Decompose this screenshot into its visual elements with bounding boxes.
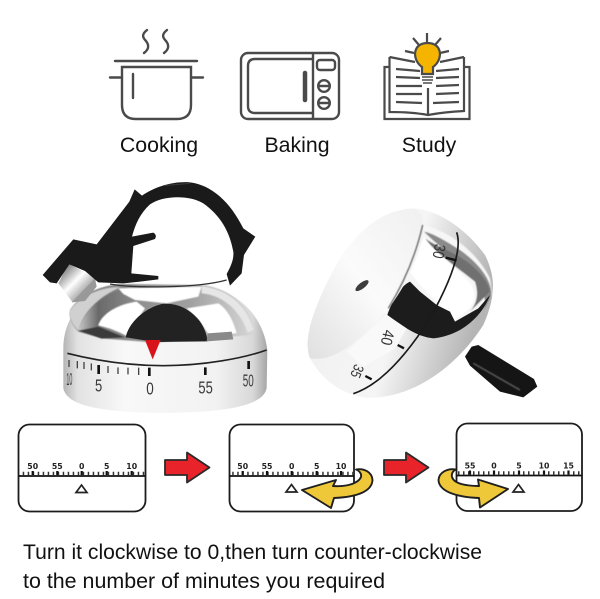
dial ticks xyxy=(69,360,139,375)
dial numbers: 0 xyxy=(146,380,154,399)
panel: dial turned clockwise xyxy=(230,424,354,512)
panel: dial at start: 55 xyxy=(52,462,63,471)
instruction text xyxy=(23,540,482,593)
panel: dial turned clockwise: 5 xyxy=(314,462,319,471)
black handle xyxy=(465,345,537,397)
panel: dial at start: 10 xyxy=(126,462,138,471)
icon: cooking pot xyxy=(110,30,203,119)
timer side view photo xyxy=(308,208,537,398)
white face xyxy=(308,209,423,359)
black handle xyxy=(43,182,255,286)
dial numbers: 55 xyxy=(198,378,213,398)
arrow: yellow curved left xyxy=(302,469,372,508)
icon: book with light bulb xyxy=(384,33,470,119)
panel: dial turned clockwise: 0 xyxy=(289,462,295,471)
dome white highlights xyxy=(118,287,202,303)
heading: Cooking: Cooking xyxy=(120,133,198,157)
spout xyxy=(58,263,97,302)
chrome reflections xyxy=(383,225,493,338)
arrow: yellow curved right xyxy=(438,469,508,508)
panel: dial set to five minutes: 55 xyxy=(465,462,475,470)
arrow: red right xyxy=(165,452,210,482)
instruction text: Turn it clockwise to 0,then turn counter-clockwise xyxy=(23,540,482,564)
white panel xyxy=(347,314,407,367)
icon: microwave xyxy=(241,53,339,119)
dome reflections xyxy=(70,284,255,343)
dial numbers: 10 xyxy=(66,369,72,389)
red pointer xyxy=(145,340,161,359)
panel: dial set to five minutes: 15 xyxy=(563,462,574,470)
panel: dial turned clockwise: 10 xyxy=(336,462,347,471)
dial number 30: 30 xyxy=(428,243,448,260)
face edge shadow xyxy=(388,225,423,308)
dial line xyxy=(353,232,458,394)
panel: dial turned clockwise: 55 xyxy=(262,462,272,471)
handle highlight xyxy=(163,183,190,186)
arrow: red right xyxy=(384,452,428,482)
panel: dial at start: 0 xyxy=(79,462,85,471)
dial line xyxy=(67,350,267,366)
kettle timer photo xyxy=(43,182,267,413)
panel: dial set to five minutes: 0 xyxy=(491,462,497,470)
dial numbers: 5 xyxy=(95,377,102,396)
instruction text: to the number of minutes you required xyxy=(23,569,385,593)
metal silhouette xyxy=(308,208,493,398)
panel: dial set to five minutes xyxy=(456,424,582,511)
panel: dial set to five minutes: 5 xyxy=(516,462,522,470)
heading: Study: Study xyxy=(402,133,457,157)
dial numbers: 50 xyxy=(243,372,254,392)
panel: dial set to five minutes: 10 xyxy=(539,462,550,470)
center hole xyxy=(354,278,370,293)
panel: dial at start xyxy=(18,424,146,512)
black dome reflection xyxy=(126,304,208,342)
panel: dial turned clockwise: 50 xyxy=(237,462,249,471)
black reflection xyxy=(387,282,490,338)
heading: Baking: Baking xyxy=(264,133,330,157)
dial number 40: 40 xyxy=(376,328,397,347)
panel: dial at start: 5 xyxy=(104,462,109,471)
panel: dial at start: 50 xyxy=(27,462,39,471)
kettle body xyxy=(63,287,267,413)
dial ticks xyxy=(365,258,457,379)
dial number 35: 35 xyxy=(347,362,367,380)
dial numbers xyxy=(66,369,254,399)
